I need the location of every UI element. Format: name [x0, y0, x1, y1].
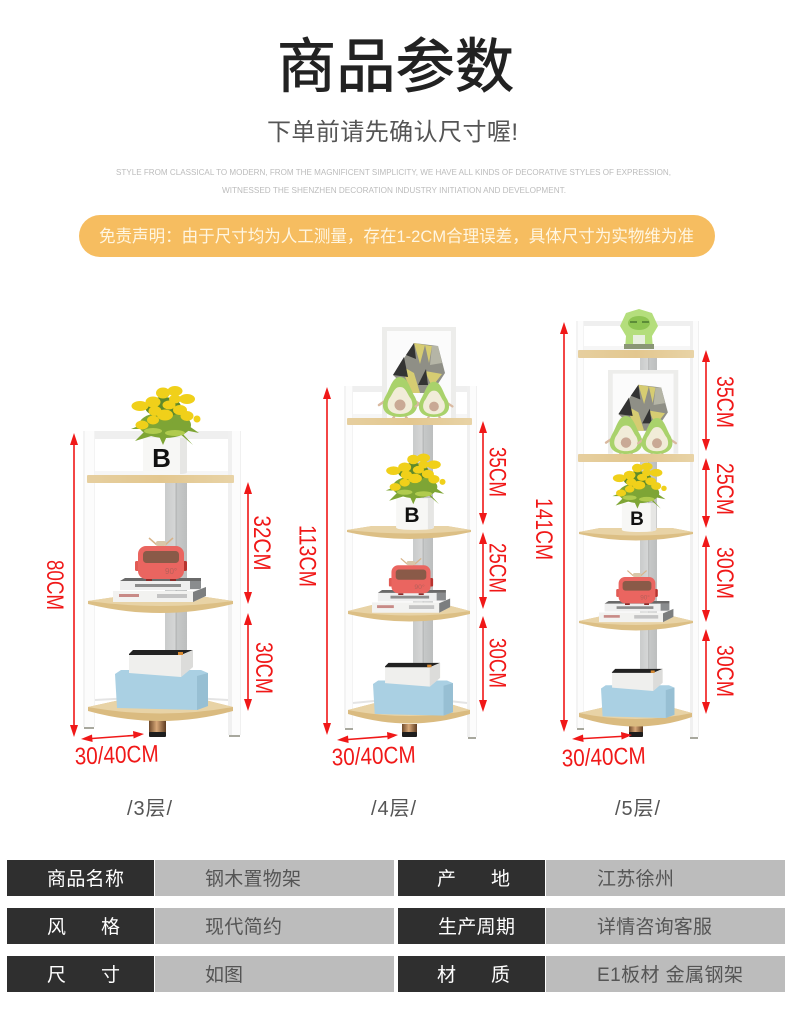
books and radio [599, 571, 673, 622]
label: 5 tier: /5层/ [615, 798, 660, 820]
stacked boxes [373, 663, 453, 716]
dimension: 141CM height [530, 322, 568, 732]
shelf board 2 [578, 454, 694, 462]
dimension: 25CM [702, 458, 738, 528]
shelf: 3 tier [83, 386, 241, 737]
disclaimer banner: 免责声明：由于尺寸均为人工测量，存在1-2CM合理误差，具体尺寸为实物维为准 [99, 227, 694, 246]
shelf: 5 tier [576, 309, 699, 739]
dimension: 30/40CM depth [561, 732, 646, 772]
shelf board 3 [348, 605, 470, 622]
row: product name / origin: 江苏徐州 [597, 868, 674, 890]
row: style / production cycle: 生产周期 [438, 916, 515, 938]
row: product name / origin [7, 860, 785, 896]
dimension: 30CM: 30CM [711, 547, 738, 599]
shelf board 3 [579, 528, 693, 540]
dimension: 35CM [702, 350, 738, 451]
row: style / production cycle: 格 [101, 916, 120, 938]
dimension: 32CM: 32CM [248, 516, 275, 570]
plant with letter pot: B [404, 504, 420, 527]
top shelf board [87, 475, 234, 483]
label: 4 tier: /4层/ [371, 798, 416, 820]
books and radio [372, 558, 450, 613]
dimension: 30/40CM depth: 30/40CM [331, 742, 416, 771]
dimension: 30/40CM depth: 30/40CM [561, 743, 646, 772]
English descriptive text: WITNESSED THE SHENZHEN DECORATION INDUSTRY INITIATION AND DEVELOPMENT. [222, 186, 566, 195]
dimension: 25CM: 25CM [711, 463, 738, 515]
row: size / material: 材 [437, 964, 456, 986]
dimension: 80CM height: 80CM [41, 560, 68, 610]
English descriptive text [116, 168, 671, 195]
dimension: 30/40CM depth: 30/40CM [74, 741, 159, 770]
row: style / production cycle: 详情咨询客服 [597, 916, 712, 938]
row: product name / origin: 地 [491, 868, 510, 890]
dimension: 30CM [244, 613, 277, 711]
row: size / material: 质 [491, 964, 510, 986]
dimension: 30/40CM depth [331, 732, 416, 771]
dimension: 32CM [244, 482, 275, 604]
plant with letter pot: B [152, 443, 171, 473]
row: size / material: E1板材 金属钢架 [597, 964, 743, 986]
shelf board 1 [578, 350, 694, 358]
shelf board 1 [347, 418, 472, 425]
row: product name / origin: 商品名称 [47, 868, 124, 890]
row: style / production cycle: 现代简约 [205, 916, 282, 938]
row: size / material: 如图 [205, 964, 243, 986]
title: 商品参数 [277, 34, 514, 100]
art frame with avocado plush toys [379, 327, 456, 420]
plant with letter pot [131, 386, 200, 475]
dimension: 30/40CM depth [74, 731, 159, 770]
shelf board 4 [579, 616, 693, 630]
dimension: 30CM: 30CM [711, 645, 738, 697]
dimension: 35CM: 35CM [484, 447, 510, 497]
plant with letter pot [386, 453, 446, 530]
row: product name / origin: 产 [437, 868, 456, 890]
stacked boxes [601, 669, 674, 718]
dimension: 30CM [479, 616, 510, 712]
plant with letter pot [612, 463, 667, 532]
books and radio [113, 538, 206, 602]
art frame with avocado plush toys [606, 370, 678, 457]
shelf board 4 [348, 703, 470, 724]
label: 3 tier: /3层/ [127, 798, 172, 820]
dimension: 113CM height: 113CM [294, 525, 320, 587]
shelf board 2 [347, 526, 471, 539]
dimension: 30CM: 30CM [250, 642, 277, 694]
dimension: 80CM height [41, 433, 78, 737]
plant with letter pot: B [630, 509, 644, 530]
middle shelf board [88, 597, 233, 613]
frog toy [620, 309, 658, 349]
shelf board 5 [579, 707, 692, 726]
dimension: 25CM: 25CM [484, 543, 510, 593]
bottom shelf board [88, 700, 233, 721]
row: style / production cycle: 风 [47, 917, 66, 938]
disclaimer banner [79, 215, 715, 257]
row: size / material: 尺 [47, 965, 66, 986]
spec table [7, 860, 785, 992]
dimension: 30CM: 30CM [484, 638, 510, 688]
subtitle: 下单前请先确认尺寸喔! [267, 119, 518, 146]
row: style / production cycle [7, 908, 785, 944]
dimension: 35CM [479, 421, 510, 525]
dimension: 30CM [702, 629, 738, 714]
row: product name / origin: 钢木置物架 [205, 868, 301, 890]
dimension: 35CM: 35CM [711, 376, 738, 428]
dimension: 30CM [702, 535, 738, 622]
shelf: 4 tier [344, 327, 477, 739]
row: size / material: 寸 [101, 964, 120, 986]
stacked boxes [115, 650, 208, 710]
row: size / material [7, 956, 785, 992]
dimension: 113CM height [294, 387, 331, 735]
dimension: 141CM height: 141CM [530, 498, 557, 560]
English descriptive text: STYLE FROM CLASSICAL TO MODERN, FROM THE MAGNIFICENT SIMPLICITY, WE HAVE ALL KINDS OF DECORATIVE STYLES OF EXPRESSION, [116, 168, 671, 177]
